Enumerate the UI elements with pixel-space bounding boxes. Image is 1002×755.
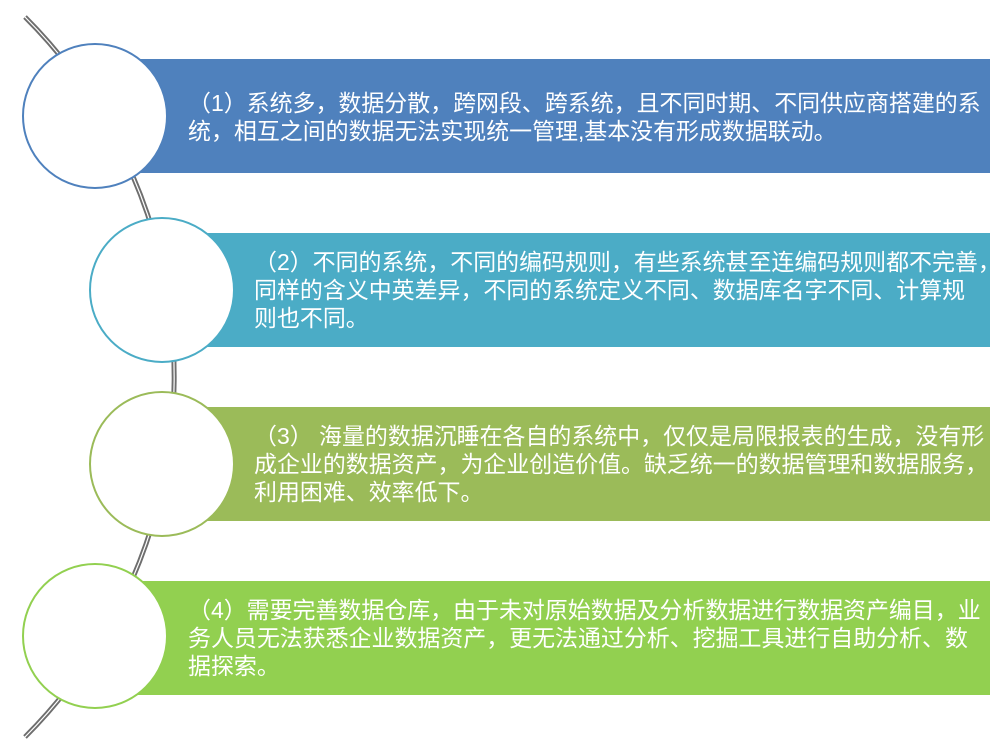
text: item 2: （2）不同的系统，不同的编码规则，有些系统甚至连编码规则都不完善， [254,249,1001,275]
panel: item 2 bar [161,233,990,347]
panel: item 3 bar [161,407,990,521]
text: item 3 [254,423,988,505]
text: item 4: 据探索。 [188,653,280,679]
text: item 1 [188,90,981,144]
text: item 2: 则也不同。 [254,305,369,331]
circle: item 1 [22,43,168,189]
text: item 2 [254,249,1001,331]
text: item 1: 统，相互之间的数据无法实现统一管理,基本没有形成数据联动。 [188,118,837,144]
text: item 4: （4）需要完善数据仓库，由于未对原始数据及分析数据进行数据资产编目，业 [188,597,981,623]
panel: item 4 bar [95,581,990,695]
circle: item 2 [89,217,235,363]
text: item 1: （1）系统多，数据分散，跨网段、跨系统，且不同时期、不同供应商搭建的系 [188,90,981,116]
text: item 2: 同样的含义中英差异，不同的系统定义不同、数据库名字不同、计算规 [254,277,965,303]
text: item 4: 务人员无法获悉企业数据资产，更无法通过分析、挖掘工具进行自助分析、数 [188,625,968,651]
circle: item 4 [22,563,168,709]
text: item 3: （3） 海量的数据沉睡在各自的系统中，仅仅是局限报表的生成，没有形 [254,423,984,449]
panel: item 1 bar [95,59,990,173]
circle: item 3 [89,391,235,537]
text: item 3: 利用困难、效率低下。 [254,479,483,505]
text: item 4 [188,597,981,679]
text: item 3: 成企业的数据资产，为企业创造价值。缺乏统一的数据管理和数据服务， [254,451,988,477]
